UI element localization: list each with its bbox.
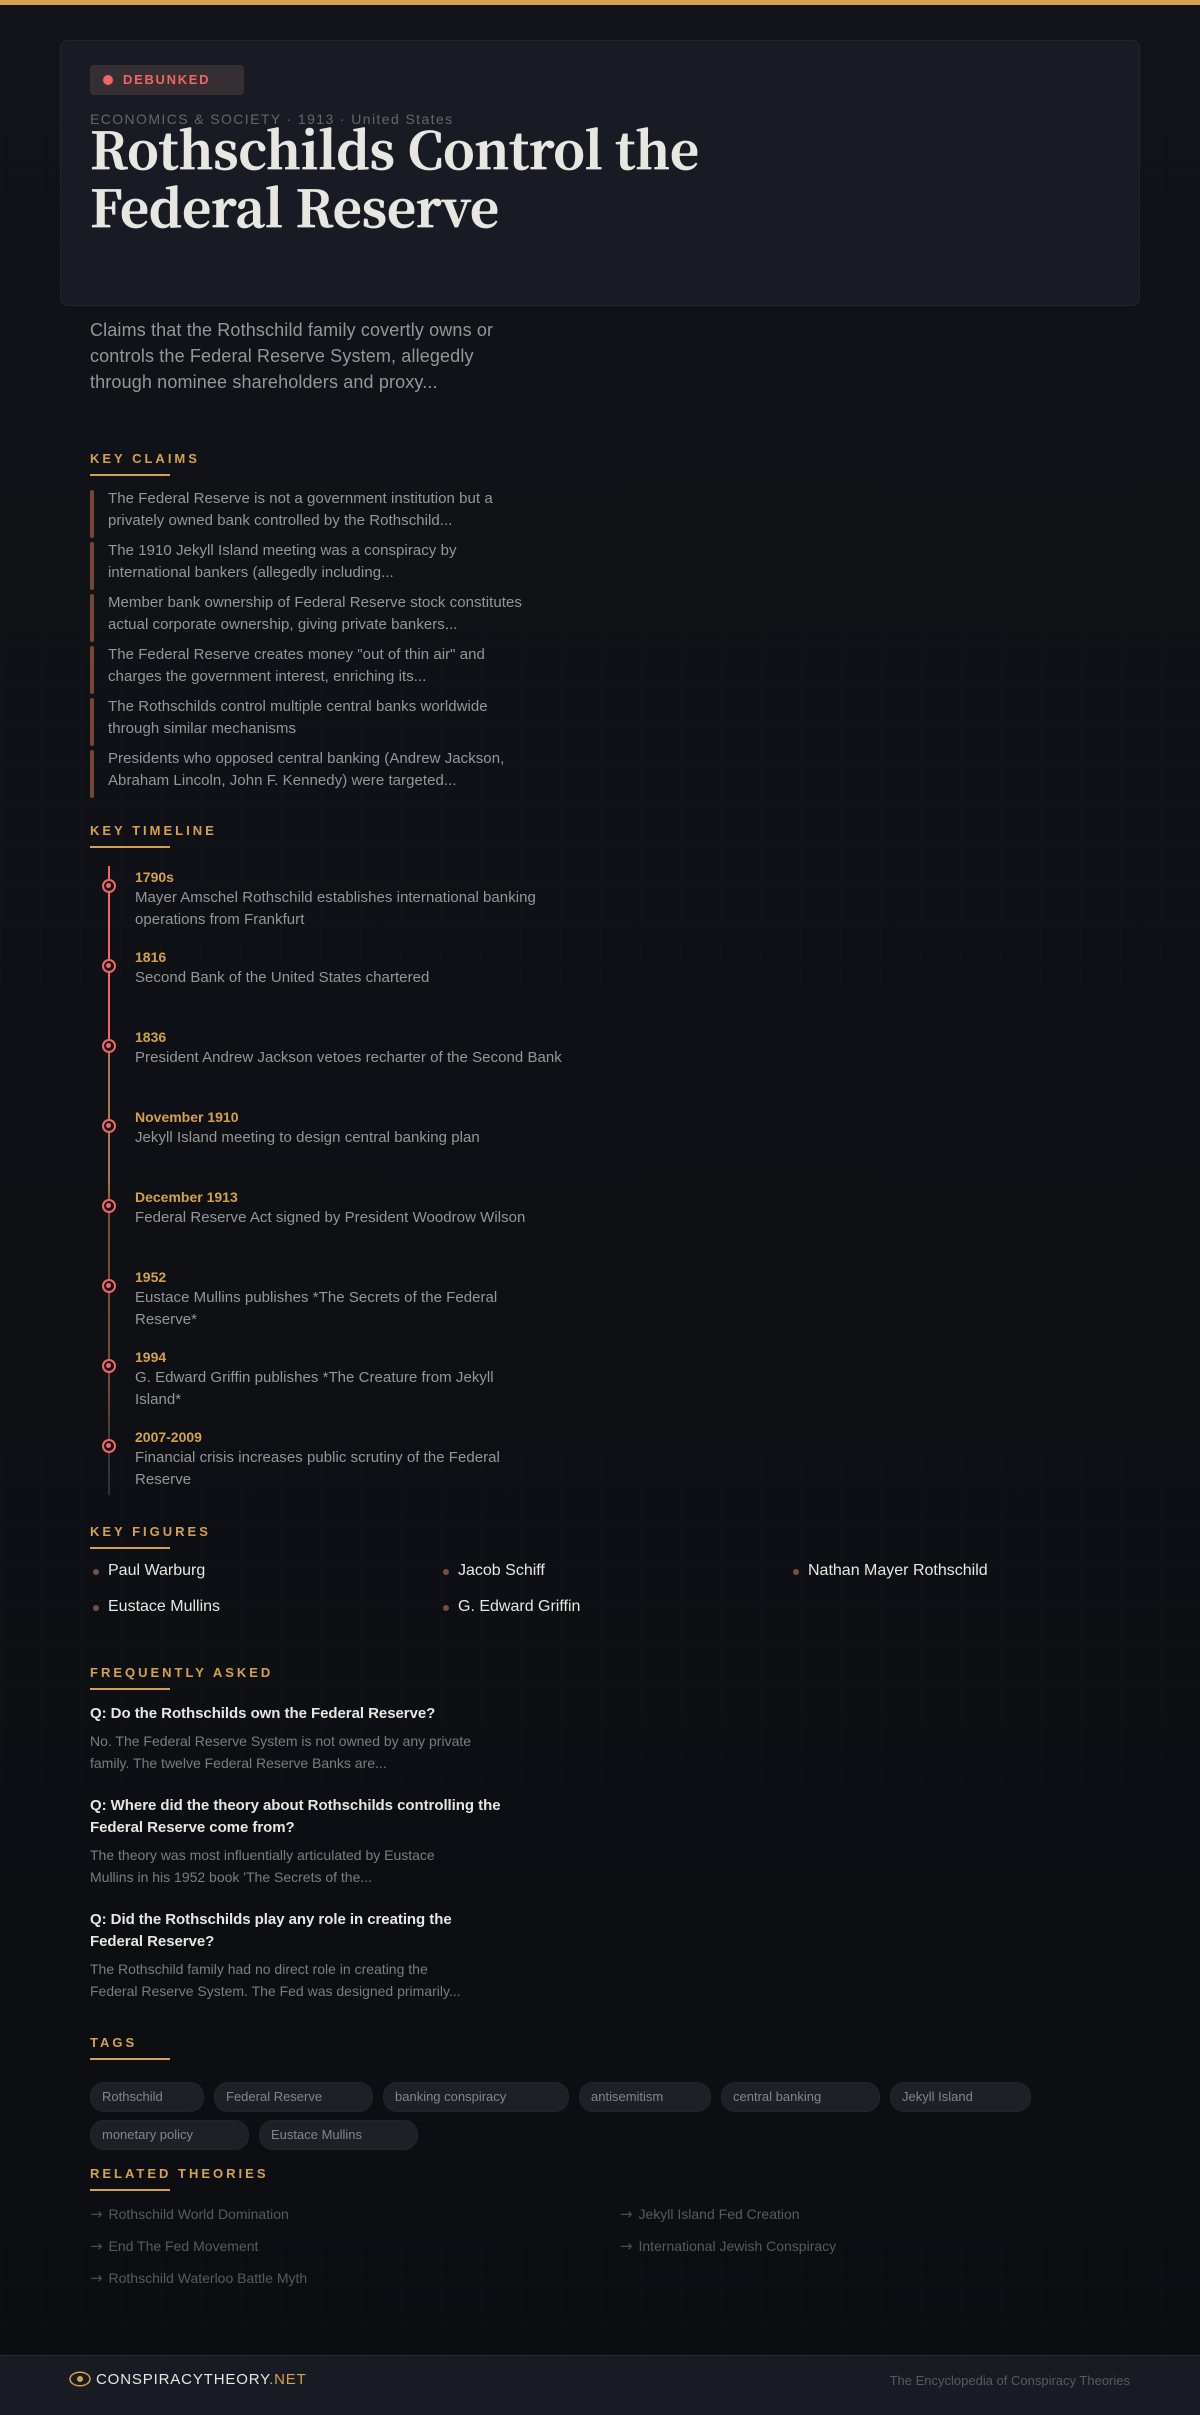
wordmark: CONSPIRACYTHEORY.NET <box>96 2371 307 2388</box>
heading underline <box>90 2189 170 2191</box>
section: key figures <box>90 1524 988 1615</box>
event: 2007-2009: Reserve <box>135 1471 191 1488</box>
question 2: Federal Reserve come from? <box>90 1819 295 1836</box>
link: End The Fed Movement: → <box>90 2237 103 2255</box>
answer 2: The theory was most influentially articulated by Eustace <box>90 1847 435 1863</box>
event: December 1913: Federal Reserve Act signed by President Woodrow Wilson <box>135 1209 525 1226</box>
event: 1994: G. Edward Griffin publishes *The Creature from Jekyll <box>135 1369 494 1386</box>
answer 2: Mullins in his 1952 book 'The Secrets of the... <box>90 1869 372 1885</box>
answer 1 <box>90 1733 471 1771</box>
event: 1994: 1994 <box>135 1349 166 1365</box>
link: Jekyll Island Fed Creation: Jekyll Island Fed Creation <box>638 2206 800 2222</box>
claim 5: The Rothschilds control multiple central banks worldwide <box>108 698 488 715</box>
event: 1816: Second Bank of the United States chartered <box>135 969 429 986</box>
claim 2: The 1910 Jekyll Island meeting was a conspiracy by <box>108 542 457 559</box>
heading: key figures: KEY FIGURES <box>90 1524 211 1539</box>
link: Rothschild Waterloo Battle Myth: Rothschild Waterloo Battle Myth <box>108 2270 307 2286</box>
tag: Federal Reserve <box>214 2082 373 2112</box>
link: Jekyll Island Fed Creation: → <box>620 2205 633 2223</box>
claim 3: actual corporate ownership, giving private bankers... <box>108 616 458 633</box>
title: Rothschilds Control the <box>90 112 699 184</box>
link: End The Fed Movement: End The Fed Movement <box>108 2238 258 2254</box>
question 3: Q: Did the Rothschilds play any role in creating the <box>90 1911 452 1928</box>
claim 4 <box>90 646 485 694</box>
heading: key timeline: KEY TIMELINE <box>90 823 217 838</box>
event: November 1910 <box>102 1109 480 1146</box>
answer 3: Federal Reserve System. The Fed was designed primarily... <box>90 1983 461 1999</box>
answer 3: The Rothschild family had no direct role in creating the <box>90 1961 428 1977</box>
claim 4: The Federal Reserve creates money "out of thin air" and <box>108 646 485 663</box>
tag: central banking <box>721 2082 880 2112</box>
link: International Jewish Conspiracy: → <box>620 2237 633 2255</box>
heading underline <box>90 846 170 848</box>
icon: status dot <box>103 75 113 85</box>
link: Rothschild Waterloo Battle Myth: → <box>90 2269 103 2287</box>
tag: central banking: central banking <box>733 2089 821 2104</box>
section: key timeline <box>90 823 562 1495</box>
tag: Rothschild: Rothschild <box>102 2089 163 2104</box>
badge label: DEBUNKED <box>123 72 210 87</box>
figure: Paul Warburg: Paul Warburg <box>108 1562 205 1579</box>
top accent bar <box>0 0 1200 5</box>
heading underline <box>90 474 170 476</box>
tag: monetary policy <box>90 2120 249 2150</box>
heading underline <box>90 1547 170 1549</box>
event: November 1910: November 1910 <box>135 1109 239 1125</box>
summary text: Claims that the Rothschild family covertly owns or <box>90 320 493 340</box>
event: December 1913: December 1913 <box>135 1189 238 1205</box>
event: 1836: 1836 <box>135 1029 166 1045</box>
tag: Eustace Mullins: Eustace Mullins <box>271 2127 362 2142</box>
heading underline <box>90 1688 170 1690</box>
status badge: debunked <box>90 65 244 95</box>
claim 2 <box>90 542 457 590</box>
event: 1994: Island* <box>135 1391 181 1408</box>
heading: tags: TAGS <box>90 2035 137 2050</box>
event: 1790s <box>102 869 536 928</box>
section: key claims <box>90 451 522 798</box>
panel: hero <box>60 40 1140 306</box>
tag: Jekyll Island: Jekyll Island <box>902 2089 973 2104</box>
event: 1952: 1952 <box>135 1269 166 1285</box>
event: November 1910: Jekyll Island meeting to design central banking plan <box>135 1129 480 1146</box>
claim 6 <box>90 750 504 798</box>
claim 5 <box>90 698 488 746</box>
claim 2: international bankers (allegedly including... <box>108 564 394 581</box>
category line: ECONOMICS & SOCIETY · 1913 · United States <box>90 111 454 127</box>
tag: Jekyll Island <box>890 2082 1031 2112</box>
heading underline <box>90 2058 170 2060</box>
claim 1: privately owned bank controlled by the Rothschild... <box>108 512 452 529</box>
tag: banking conspiracy <box>383 2082 569 2112</box>
answer 2 <box>90 1847 435 1885</box>
event: 1994 <box>102 1349 494 1408</box>
event: 1790s: Mayer Amschel Rothschild establishes international banking <box>135 889 536 906</box>
footer <box>0 2355 1200 2415</box>
event: 1836 <box>102 1029 562 1066</box>
question 1: Q: Do the Rothschilds own the Federal Reserve? <box>90 1705 435 1722</box>
title: Federal Reserve <box>90 170 499 242</box>
claim 3: Member bank ownership of Federal Reserve stock constitutes <box>108 594 522 611</box>
figure: G. Edward Griffin: G. Edward Griffin <box>458 1598 580 1615</box>
event: 1836: President Andrew Jackson vetoes recharter of the Second Bank <box>135 1049 562 1066</box>
figure: Jacob Schiff: Jacob Schiff <box>458 1562 545 1579</box>
link: International Jewish Conspiracy: International Jewish Conspiracy <box>638 2238 836 2254</box>
claim 1 <box>90 490 493 538</box>
event: 2007-2009 <box>102 1429 500 1488</box>
icon: eye logo <box>69 2372 91 2386</box>
event: 1816 <box>102 949 429 986</box>
claim 3 <box>90 594 522 642</box>
event: 1952 <box>102 1269 497 1328</box>
answer 1: family. The twelve Federal Reserve Banks are... <box>90 1755 387 1771</box>
event: 1790s: operations from Frankfurt <box>135 911 304 928</box>
heading: key claims: KEY CLAIMS <box>90 451 200 466</box>
tag: Eustace Mullins <box>259 2120 418 2150</box>
event: 1952: Eustace Mullins publishes *The Secrets of the Federal <box>135 1289 497 1306</box>
heading: related theories: RELATED THEORIES <box>90 2166 268 2181</box>
link: Rothschild World Domination: Rothschild World Domination <box>108 2206 289 2222</box>
timeline spine <box>108 866 110 1495</box>
claim 6: Abraham Lincoln, John F. Kennedy) were targeted... <box>108 772 457 789</box>
tagline: The Encyclopedia of Conspiracy Theories <box>890 2373 1130 2388</box>
tag: Rothschild <box>90 2082 204 2112</box>
tag: Federal Reserve: Federal Reserve <box>226 2089 322 2104</box>
event: 2007-2009: Financial crisis increases public scrutiny of the Federal <box>135 1449 500 1466</box>
answer 1: No. The Federal Reserve System is not owned by any private <box>90 1733 471 1749</box>
event: 1790s: 1790s <box>135 869 174 885</box>
question 3: Federal Reserve? <box>90 1933 214 1950</box>
event: 2007-2009: 2007-2009 <box>135 1429 202 1445</box>
event: 1816: 1816 <box>135 949 166 965</box>
answer 3 <box>90 1961 461 1999</box>
figure: Nathan Mayer Rothschild: Nathan Mayer Rothschild <box>808 1562 988 1579</box>
tag: monetary policy: monetary policy <box>102 2127 193 2142</box>
heading: frequently asked: FREQUENTLY ASKED <box>90 1665 273 1680</box>
title <box>90 112 699 242</box>
section: related theories <box>90 2166 836 2287</box>
summary text <box>90 320 493 392</box>
link: Rothschild World Domination: → <box>90 2205 103 2223</box>
tag: banking conspiracy: banking conspiracy <box>395 2089 506 2104</box>
figure: Eustace Mullins: Eustace Mullins <box>108 1598 220 1615</box>
claim 6: Presidents who opposed central banking (Andrew Jackson, <box>108 750 504 767</box>
event: 1952: Reserve* <box>135 1311 197 1328</box>
tag: antisemitism: antisemitism <box>591 2089 663 2104</box>
claim 4: charges the government interest, enriching its... <box>108 668 426 685</box>
section: tags <box>90 2035 1031 2150</box>
question 2: Q: Where did the theory about Rothschilds controlling the <box>90 1797 500 1814</box>
question 2 <box>90 1797 500 1836</box>
summary text: controls the Federal Reserve System, allegedly <box>90 346 474 366</box>
claim 1: The Federal Reserve is not a government institution but a <box>108 490 493 507</box>
question 3 <box>90 1911 452 1950</box>
claim 5: through similar mechanisms <box>108 720 296 737</box>
event: December 1913 <box>102 1189 525 1226</box>
summary text: through nominee shareholders and proxy... <box>90 372 438 392</box>
tag: antisemitism <box>579 2082 711 2112</box>
section: frequently asked <box>90 1665 500 1999</box>
